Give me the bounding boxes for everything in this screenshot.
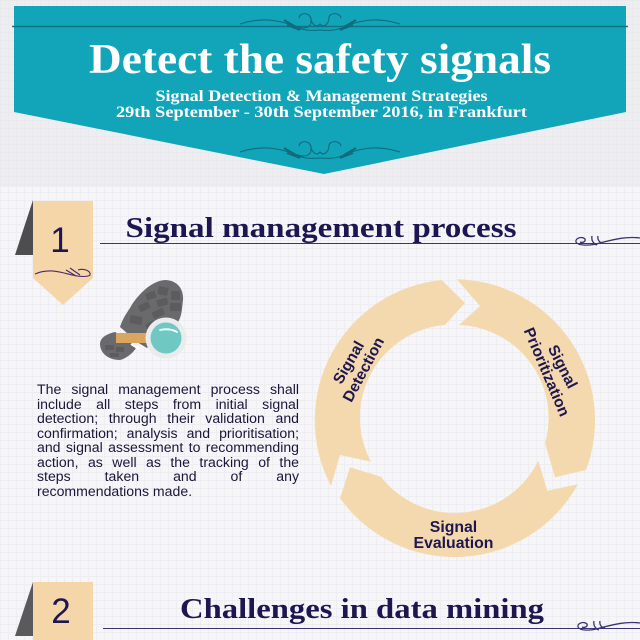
section 1 badge xyxy=(15,200,93,305)
text block: process description xyxy=(37,381,299,499)
arrow: signal detection: Detection xyxy=(340,335,388,405)
arrow: signal evaluation xyxy=(340,461,578,557)
text block: process description: steps taken and of any xyxy=(37,468,299,484)
text block: process description: include all steps from initial signal xyxy=(37,396,299,412)
arrow: signal detection: Signal xyxy=(330,338,368,387)
ornament: banner bottom xyxy=(240,142,400,158)
arrow: signal prioritization: Signal xyxy=(544,342,580,392)
section 1 heading: Signal management process xyxy=(126,212,516,244)
icon: boot print under magnifying glass xyxy=(100,280,186,360)
text block: process description: action, as well as the tracking of the xyxy=(37,454,299,470)
title: Detect the safety signals xyxy=(89,37,551,83)
arrow: signal prioritization: Prioritization xyxy=(520,325,572,419)
header banner xyxy=(12,6,628,174)
text block: process description: recommendations made. xyxy=(37,483,192,499)
subtitle: Signal Detection & Management Strategies xyxy=(156,88,488,105)
section 2 badge xyxy=(15,582,93,640)
chart: signal management cycle xyxy=(315,279,595,557)
section 1 badge: 1 xyxy=(50,221,70,260)
section 2 heading xyxy=(103,593,640,630)
section 2 badge: 2 xyxy=(51,592,71,631)
arrow: signal detection xyxy=(315,280,465,486)
text block: process description: confirmation; analysis and prioritisation; xyxy=(37,425,299,441)
text block: process description: The signal management process shall xyxy=(37,381,299,397)
ornament: banner top xyxy=(240,14,400,30)
arrow: signal evaluation: Signal xyxy=(430,519,477,536)
subtitle: 29th September - 30th September 2016, in Frankfurt xyxy=(116,104,528,121)
subtitle xyxy=(116,88,528,121)
section 2 heading: Challenges in data mining xyxy=(180,593,545,625)
arrow: signal evaluation: Evaluation xyxy=(414,535,493,552)
arrow: signal prioritization xyxy=(457,279,595,477)
section 1 heading xyxy=(100,212,640,245)
text block: process description: and signal assessment to recommending xyxy=(37,439,299,455)
text block: process description: detection; through their validation and xyxy=(37,410,299,426)
